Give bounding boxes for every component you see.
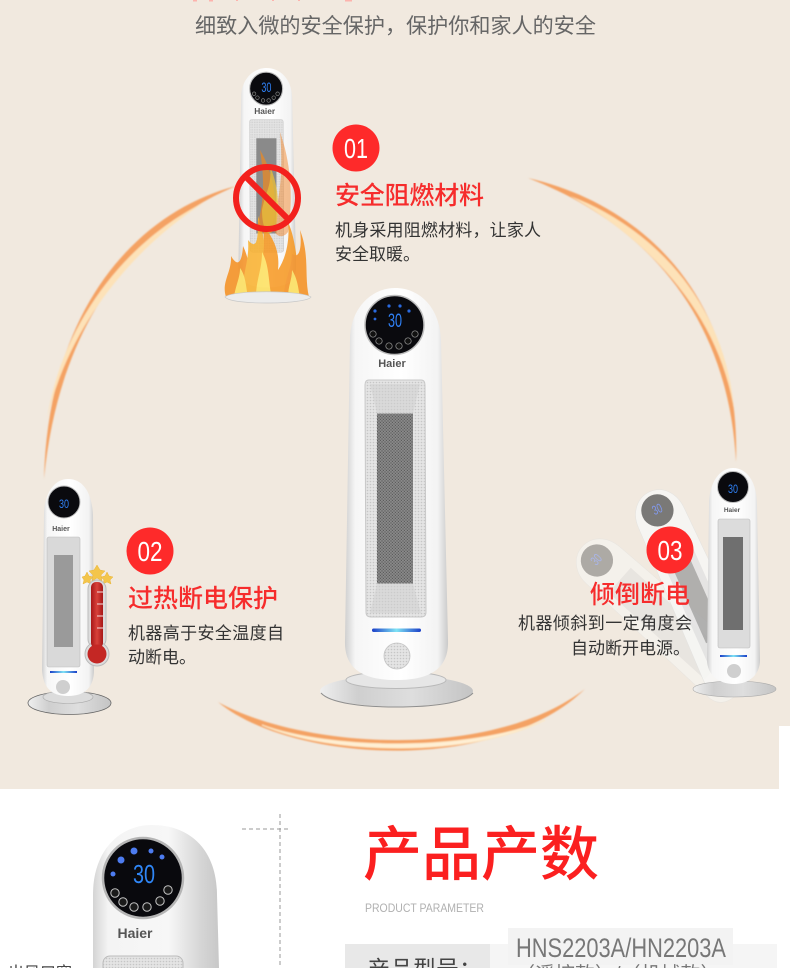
description: tip-over cut-off	[518, 614, 692, 658]
heater speaker	[384, 643, 410, 669]
badge: 02	[126, 528, 174, 574]
badge: 01: 01	[344, 133, 368, 164]
flames	[225, 132, 309, 297]
description: flame retardant: 安全取暖。	[335, 245, 420, 264]
heater: tilted ghost near: 30	[650, 500, 665, 518]
badge: 03	[646, 526, 694, 574]
heater grille	[365, 380, 426, 617]
close-up logo: Haier	[117, 925, 153, 941]
heater: overheat product: Haier	[52, 526, 70, 533]
heater logo: Haier	[378, 358, 406, 370]
badge: 02: 02	[138, 536, 162, 567]
heater: tilted ghost far: 30	[587, 551, 605, 568]
table model value: HNS2203A/HN2203A	[516, 933, 726, 963]
table value cell	[490, 944, 777, 968]
heater light bar	[372, 628, 421, 632]
close-up temperature: 30	[133, 859, 155, 889]
heater: centre product	[320, 288, 473, 707]
heater: centre product: 30	[388, 311, 402, 332]
close-up display	[103, 838, 183, 918]
badge: 01	[332, 124, 380, 172]
table	[345, 928, 777, 968]
arc: top left	[44, 186, 236, 479]
heater: flame product	[238, 68, 296, 288]
clipped heading remnants	[193, 0, 352, 2]
heater: tilt product	[693, 468, 776, 697]
close-up grille	[103, 956, 183, 968]
heading: overheat protection: 过热断电保护	[128, 585, 278, 613]
description: overheat protection	[128, 624, 284, 667]
heater base	[320, 676, 473, 706]
subtitle: 细致入微的安全保护，保护你和家人的安全	[195, 15, 596, 38]
icon: thermometer	[82, 565, 113, 666]
description: flame retardant: 机身采用阻燃材料，让家人	[335, 221, 541, 240]
title: product parameter: 产品产数	[363, 822, 599, 888]
description: tip-over cut-off: 机器倾斜到一定角度会	[518, 614, 692, 633]
subtitle: product parameter: PRODUCT PARAMETER	[365, 901, 484, 915]
description: overheat protection: 机器高于安全温度自	[128, 624, 284, 643]
dimension lines	[242, 814, 291, 968]
table label cell	[345, 944, 490, 968]
heater: overheat product: 30	[59, 497, 69, 511]
description: tip-over cut-off: 自动断开电源。	[571, 639, 690, 658]
heading: tip-over cut-off: 倾倒断电	[590, 581, 690, 609]
description: overheat protection: 动断电。	[128, 648, 196, 667]
heater: tilted ghost near	[624, 480, 763, 699]
heater: tilted ghost far	[564, 525, 761, 711]
badge: 03: 03	[658, 535, 682, 566]
flame product base	[225, 292, 311, 303]
heater body	[346, 672, 446, 688]
heater: overheat product	[28, 479, 111, 714]
description: flame retardant	[335, 221, 541, 264]
arc: bottom	[218, 689, 585, 751]
heater: flame product: Haier	[254, 106, 276, 116]
heater: flame product: 30	[261, 80, 271, 95]
product parameter: heater close-up	[93, 825, 219, 968]
heater: tilt product: Haier	[724, 507, 741, 514]
icon: prohibition sign	[236, 167, 298, 229]
heading: flame retardant: 安全阻燃材料	[335, 182, 484, 210]
heater: tilt product: 30	[728, 482, 738, 496]
arc: top right	[528, 178, 736, 462]
heater display	[365, 296, 424, 354]
